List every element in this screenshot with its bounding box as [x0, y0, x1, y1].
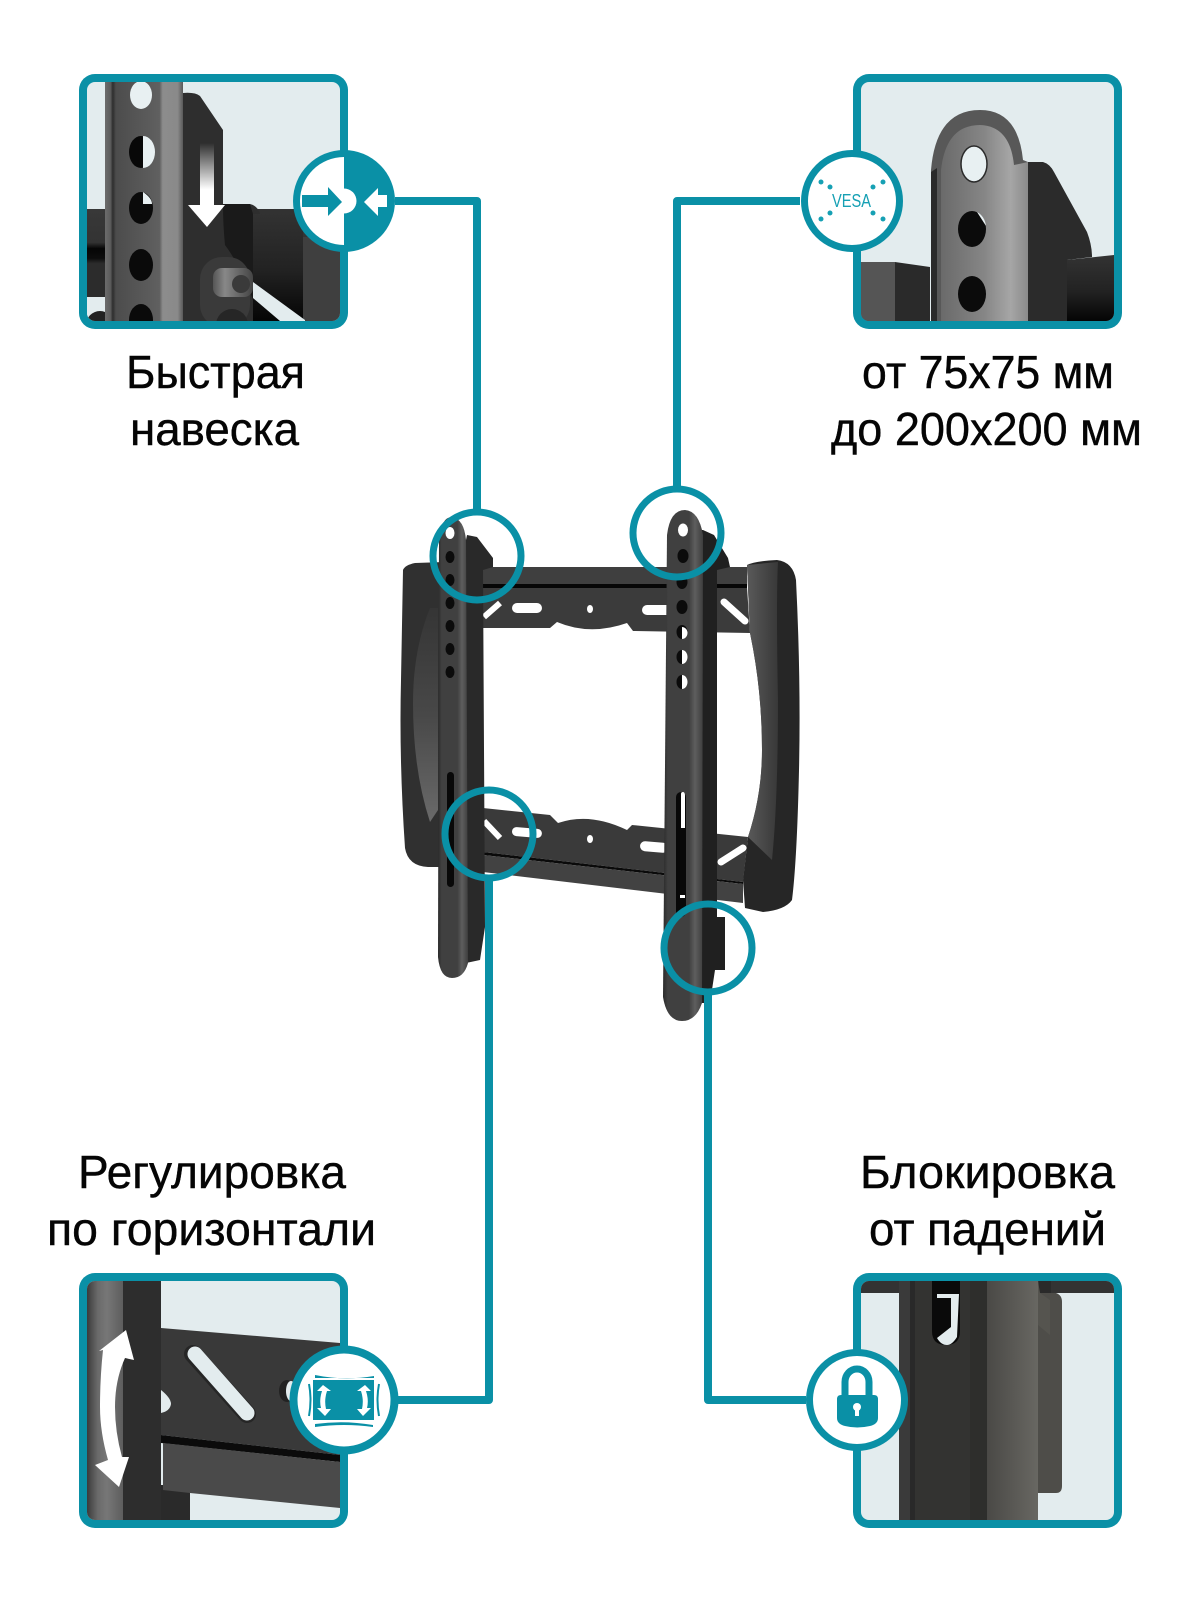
highlight ring: bottom left — [445, 790, 533, 878]
text: horizontal adjustment: Регулировка — [78, 1146, 346, 1198]
highlight ring: bottom right — [664, 904, 752, 992]
panel: fall lock photo — [853, 1273, 1122, 1528]
top cross bar — [483, 567, 750, 633]
text: horizontal adjustment: по горизонтали — [47, 1203, 376, 1255]
text: quick hanging — [126, 346, 305, 455]
icon: lock — [810, 1352, 904, 1448]
connector: fall lock — [708, 992, 806, 1400]
text: quick hanging: Быстрая — [126, 346, 305, 398]
text: VESA sizes — [831, 346, 1142, 455]
icon: horizontal adjustment — [294, 1350, 394, 1450]
connector: quick hanging — [395, 201, 477, 510]
text: horizontal adjustment — [47, 1146, 376, 1255]
panel: VESA photo — [853, 74, 1122, 329]
icon: VESA — [804, 154, 900, 248]
panel: quick hanging photo — [79, 74, 348, 341]
wall mount bracket — [400, 510, 800, 1021]
connector: horizontal adjustment — [395, 878, 489, 1400]
panel: horizontal adjustment photo — [79, 1273, 348, 1528]
connector: VESA — [677, 201, 800, 487]
text: fall lock: от падений — [869, 1203, 1106, 1255]
left side plate — [400, 562, 445, 867]
right vertical strip — [663, 510, 730, 1021]
right side plate — [743, 560, 800, 912]
text: VESA sizes: до 200х200 мм — [831, 403, 1142, 455]
icon: quick hanging — [293, 150, 395, 252]
text: fall lock — [860, 1146, 1115, 1255]
bottom cross bar — [483, 808, 748, 903]
left vertical strip — [438, 517, 493, 978]
highlight ring: top right — [633, 489, 721, 577]
text: fall lock: Блокировка — [860, 1146, 1115, 1198]
highlight ring: top left — [433, 512, 521, 600]
icon: VESA: VESA — [832, 191, 871, 211]
text: VESA sizes: от 75х75 мм — [862, 346, 1114, 398]
text: quick hanging: навеска — [130, 403, 299, 455]
